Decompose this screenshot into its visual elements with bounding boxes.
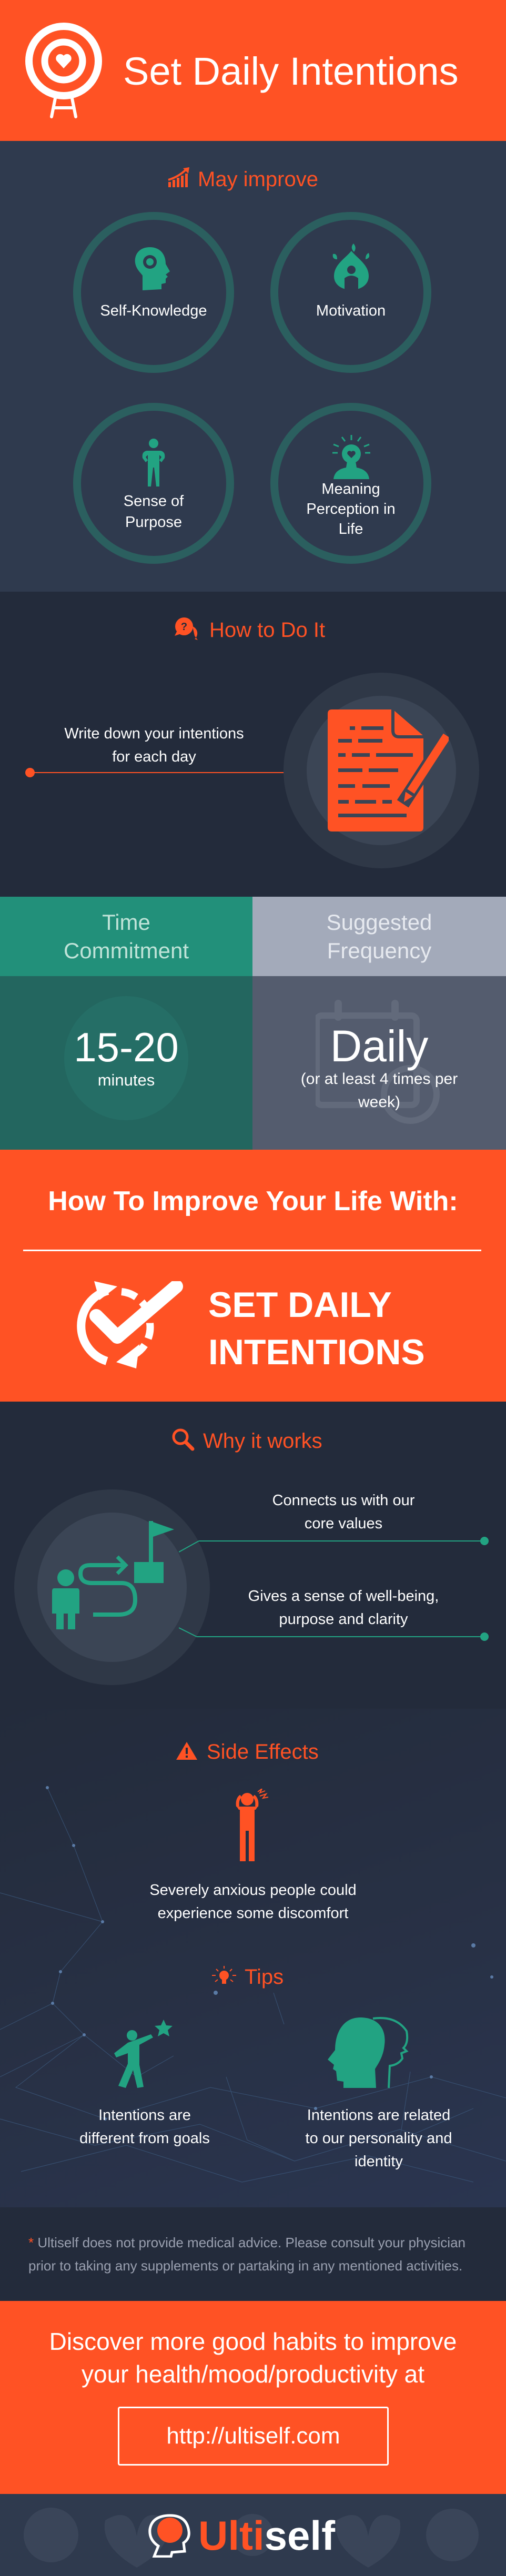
disclaimer: prior to taking any supplements or partaking in any mentioned activities. — [28, 2258, 462, 2274]
heading: may improve: May improve — [198, 168, 318, 191]
text: write down: Write down your intentions — [64, 725, 244, 742]
label: Perception in — [306, 501, 396, 518]
label — [306, 481, 396, 537]
tip 1: goals — [79, 2020, 210, 2147]
icon: anxious person — [236, 1789, 268, 1861]
text: connects us — [272, 1492, 414, 1532]
heading: tips — [212, 1965, 284, 1989]
icon: clock bg — [64, 996, 188, 1120]
circle: sense of purpose — [73, 403, 234, 564]
text: connects us: Connects us with our — [272, 1492, 414, 1509]
icon: target — [25, 23, 102, 118]
tip 2: identity — [305, 2017, 452, 2170]
heading: how to do it: How to Do It — [209, 618, 325, 642]
text: anxious: Severely anxious people could — [149, 1882, 357, 1899]
text: Intentions are related — [307, 2107, 450, 2124]
heading: how to do it: ? — [181, 621, 187, 633]
button: url — [118, 2407, 389, 2466]
panel: why it works — [0, 1402, 506, 1709]
title: Set Daily Intentions — [123, 49, 459, 93]
value: daily: (or at least 4 times per — [301, 1070, 458, 1088]
faint background icons — [24, 2508, 479, 2568]
text: discover more: Discover more good habits to improve — [49, 2328, 457, 2355]
header — [0, 0, 506, 141]
circle: motivation — [270, 212, 431, 373]
panel: side effects and tips — [0, 1709, 506, 2207]
icon: two heads — [328, 2017, 408, 2088]
value: daily: week) — [358, 1093, 400, 1111]
text: to our personality and — [306, 2130, 452, 2147]
icon: document with pencil — [284, 673, 479, 868]
value: 15-20 minutes: minutes — [98, 1071, 155, 1089]
header: time commitment: Commitment — [64, 938, 189, 963]
value: daily — [301, 1021, 458, 1111]
heading: tips: Tips — [245, 1965, 284, 1989]
text: anxious — [149, 1882, 357, 1922]
header: suggested frequency — [252, 897, 506, 976]
circle: meaning perception — [270, 403, 431, 564]
text: gives a sense — [248, 1588, 439, 1628]
label: Purpose — [125, 514, 182, 531]
text — [305, 2107, 452, 2170]
text: discover more: your health/mood/productivity at — [82, 2360, 424, 2388]
text: identity — [355, 2153, 403, 2170]
logo: ultiself: Ultiself — [198, 2512, 335, 2559]
text: write down: for each day — [112, 748, 196, 765]
network background — [0, 1786, 506, 2183]
heading: why it works: Why it works — [203, 1429, 322, 1453]
connector 1 — [179, 1537, 489, 1553]
header: suggested frequency: Suggested — [327, 910, 432, 935]
icon: path to flag — [14, 1489, 210, 1685]
header: suggested frequency: Frequency — [327, 938, 431, 963]
disclaimer — [28, 2235, 465, 2274]
text: anxious: experience some discomfort — [158, 1905, 348, 1922]
text: gives a sense: Gives a sense of well-being, — [248, 1588, 439, 1605]
panel: may improve — [0, 141, 506, 592]
icon: head — [135, 247, 170, 290]
connector line — [25, 768, 284, 777]
icon: glowing head — [332, 435, 370, 479]
button: url: http://ultiself.com — [166, 2423, 340, 2449]
value: daily: Daily — [330, 1021, 428, 1071]
text: connects us: core values — [305, 1515, 382, 1532]
footer — [0, 2494, 506, 2576]
title: set daily intentions — [208, 1285, 425, 1372]
heading: how to improve: How To Improve Your Life With: — [48, 1186, 458, 1216]
panel: suggested frequency — [252, 897, 506, 1150]
icon: check cycle — [77, 1281, 183, 1368]
panel: how to improve banner — [0, 1150, 506, 1402]
value: 15-20 minutes: 15-20 — [74, 1024, 179, 1070]
panel: how to do it — [0, 592, 506, 897]
title: set daily intentions: INTENTIONS — [208, 1332, 425, 1372]
header: time commitment: Time — [102, 910, 150, 935]
text: Intentions are — [98, 2107, 191, 2124]
label: Meaning — [321, 481, 380, 498]
text — [79, 2107, 210, 2147]
icon: fire person — [332, 244, 369, 289]
disclaimer: * Ultiself does not provide medical advice. Please consult your physician — [28, 2235, 465, 2250]
text: write down — [64, 725, 244, 765]
header: time commitment — [0, 897, 252, 976]
text: gives a sense: purpose and clarity — [279, 1611, 408, 1628]
icon: reaching star — [114, 2020, 173, 2088]
circle: self-knowledge — [73, 212, 234, 373]
panel: call to action — [0, 2301, 506, 2494]
label: Self-Knowledge — [100, 302, 207, 319]
text: different from goals — [79, 2130, 210, 2147]
title: set daily intentions: SET DAILY — [208, 1285, 392, 1325]
icon: calendar bg — [316, 1000, 440, 1124]
label: Motivation — [316, 302, 386, 319]
text: discover more — [49, 2328, 457, 2388]
panel: time commitment — [0, 897, 252, 1150]
connector 2 — [179, 1627, 489, 1641]
heading: side effects: Side Effects — [207, 1740, 319, 1763]
label: Life — [339, 521, 363, 537]
label — [124, 493, 184, 531]
icon: standing man — [142, 439, 165, 486]
label: Sense of — [124, 493, 184, 510]
